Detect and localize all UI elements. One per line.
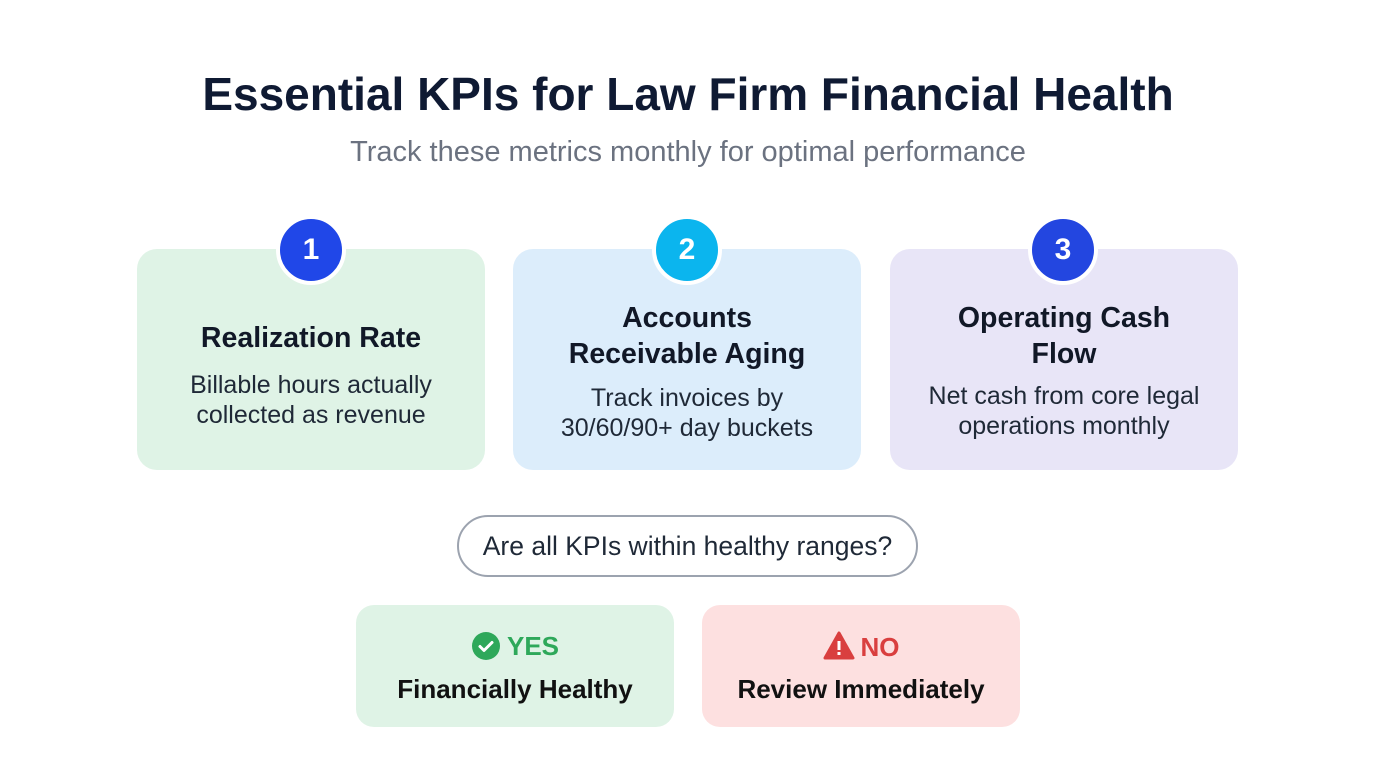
- result: no: [702, 605, 1020, 727]
- badge 1: [276, 215, 346, 285]
- badge 3: 3: [1055, 233, 1071, 266]
- description: 30/60/90+ day buckets: [561, 414, 813, 442]
- no label with warning icon: [824, 631, 900, 662]
- description: Net cash from core legal: [929, 382, 1199, 410]
- heading: Flow: [1032, 338, 1096, 370]
- heading: [958, 302, 1170, 370]
- heading: Receivable Aging: [569, 338, 805, 370]
- description: operations monthly: [958, 412, 1170, 440]
- description: [561, 384, 813, 442]
- badge 1: 1: [303, 233, 319, 266]
- heading: Realization Rate: [201, 322, 421, 354]
- badge 2: [652, 215, 722, 285]
- badge 2: 2: [679, 233, 695, 266]
- no label with warning icon: NO: [860, 632, 900, 662]
- heading: [569, 302, 805, 370]
- title: Essential KPIs for Law Firm Financial Health: [202, 68, 1174, 120]
- question pill: Are all KPIs within healthy ranges?: [483, 531, 892, 561]
- panel: realization rate: [137, 249, 485, 470]
- description: [929, 382, 1199, 440]
- panel: operating cash flow: [890, 249, 1238, 470]
- description: Track invoices by: [591, 384, 783, 412]
- no text: Review Immediately: [737, 674, 985, 704]
- heading: Accounts: [622, 302, 752, 334]
- description: collected as revenue: [196, 401, 426, 429]
- question pill: [457, 515, 918, 577]
- heading: Operating Cash: [958, 302, 1170, 334]
- subtitle: Track these metrics monthly for optimal performance: [350, 136, 1026, 168]
- description: Billable hours actually: [190, 371, 432, 399]
- badge 3: [1028, 215, 1098, 285]
- panel: accounts receivable aging: [513, 249, 861, 470]
- yes label with check icon: [472, 631, 559, 661]
- yes text: Financially Healthy: [397, 674, 633, 704]
- description: [190, 371, 432, 429]
- result: yes: [356, 605, 674, 727]
- yes label with check icon: YES: [507, 631, 559, 661]
